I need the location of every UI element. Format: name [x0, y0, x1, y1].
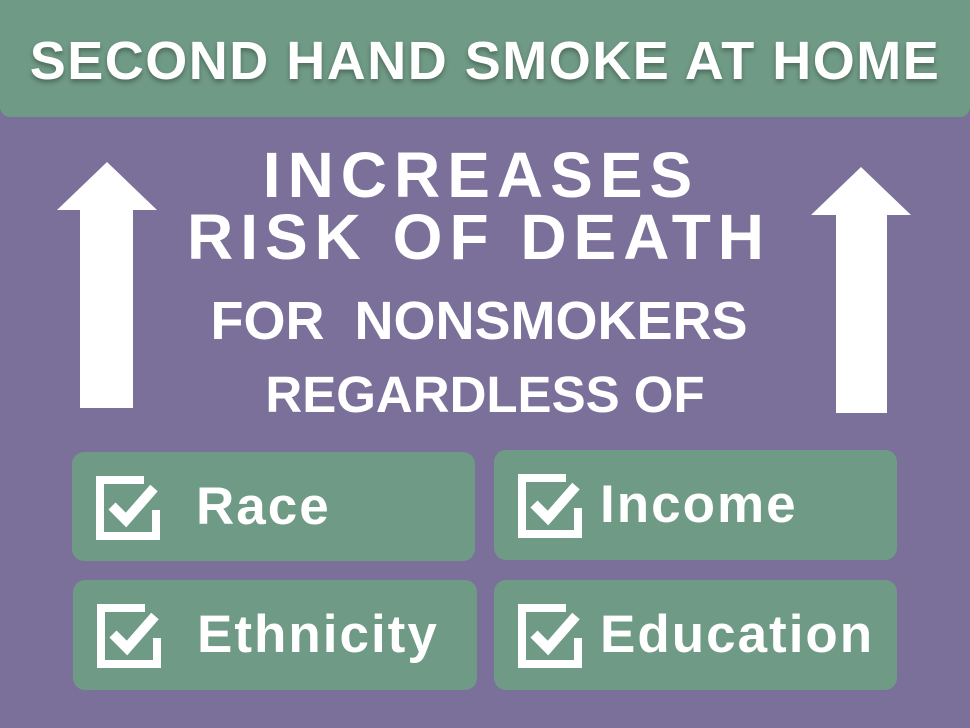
panel: race — [72, 452, 475, 561]
label: Income — [600, 475, 798, 534]
panel: education — [494, 580, 897, 690]
icon: checkbox — [96, 476, 160, 540]
subheading: regardless of: REGARDLESS OF — [265, 366, 705, 423]
header banner — [0, 0, 970, 117]
label: Ethnicity — [197, 605, 439, 664]
heading: risk of death: RISK OF DEATH — [187, 201, 771, 273]
label: Education — [600, 605, 874, 664]
panel: income — [494, 450, 897, 560]
subheading: for nonsmokers: FOR NONSMOKERS — [210, 291, 748, 351]
heading: increases: INCREASES — [263, 139, 699, 211]
label: Race — [196, 477, 331, 536]
icon: checkbox — [518, 474, 582, 538]
arrow: right up — [811, 167, 911, 413]
icon: checkbox — [518, 604, 582, 668]
panel: ethnicity — [73, 580, 477, 690]
title: SECOND HAND SMOKE AT HOME — [30, 31, 940, 91]
arrow: left up — [57, 162, 157, 408]
icon: checkbox — [97, 604, 161, 668]
